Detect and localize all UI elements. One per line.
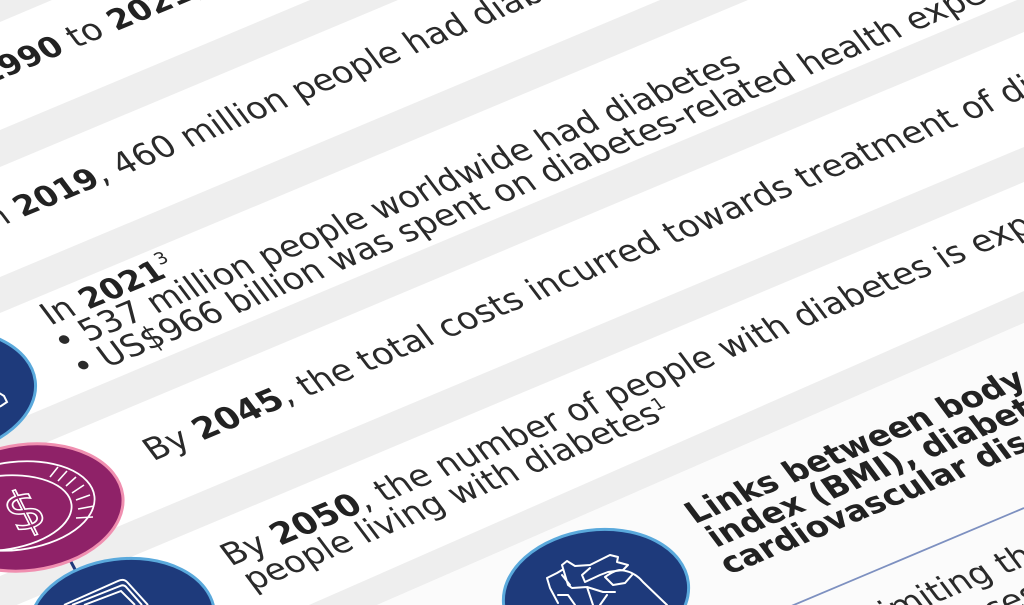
connector line — [70, 560, 78, 575]
panel: BMI links — [377, 323, 1024, 605]
text: US$966 billion: • — [63, 346, 104, 385]
icon: heart circle — [496, 519, 696, 605]
divider line — [770, 508, 1024, 605]
text: 2021 heading: 3 — [150, 248, 173, 269]
text: people living: people living with diabetes — [234, 395, 668, 597]
text: 537 million: • — [44, 321, 85, 359]
icon: magenta coin circle — [0, 433, 131, 582]
icon: navy circle with layered document — [22, 548, 222, 605]
text: people living: 1 — [647, 394, 670, 415]
text: 2021 heading: In 2021 — [32, 254, 173, 332]
text: 537 million: 537 million people worldwide had diabetes — [70, 44, 748, 349]
icon: navy circle with document — [0, 318, 43, 468]
